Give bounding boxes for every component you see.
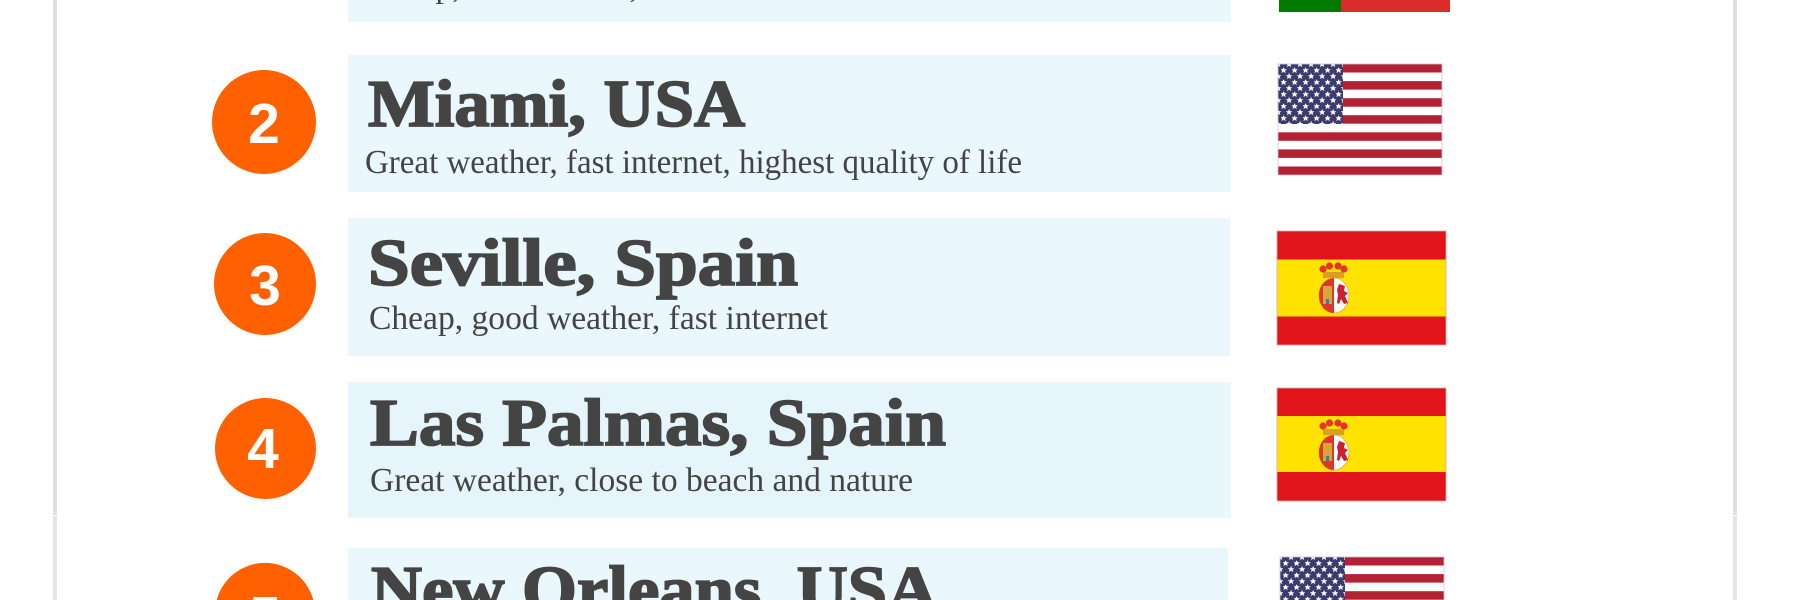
icon: Spain flag bbox=[1277, 231, 1446, 345]
crest bbox=[1319, 419, 1349, 470]
heading: Miami, USA: Miami, USA bbox=[368, 67, 745, 141]
rank badge 4 bbox=[215, 398, 316, 499]
row 1: Portugal entry, cropped by top edge bbox=[348, 0, 1450, 22]
rank badge 2 bbox=[212, 70, 316, 174]
panel: Seville bbox=[348, 218, 1230, 356]
panel: New Orleans bbox=[348, 548, 1228, 600]
heading: Seville, Spain: Seville, Spain bbox=[368, 226, 798, 300]
description: Miami: Great weather, fast internet, highest quality of life bbox=[365, 144, 1022, 181]
icon: Spain flag bbox=[1277, 388, 1446, 501]
rank badge 4: 4 bbox=[247, 417, 279, 481]
description: Seville: Cheap, good weather, fast internet bbox=[369, 300, 829, 337]
description: Las Palmas: Great weather, close to beach and nature bbox=[370, 462, 913, 499]
row 2: Miami bbox=[212, 55, 1442, 192]
heading: Las Palmas, Spain: Las Palmas, Spain bbox=[370, 386, 946, 460]
row 5: New Orleans bbox=[217, 548, 1444, 600]
icon: USA flag bbox=[1278, 64, 1442, 175]
row 4: Las Palmas bbox=[215, 382, 1446, 518]
icon: USA flag bbox=[1280, 557, 1444, 600]
rank badge 2: 2 bbox=[248, 92, 280, 156]
row 3: Seville bbox=[214, 218, 1446, 356]
rank badge 5 bbox=[217, 563, 313, 600]
rank badge 3: 3 bbox=[249, 254, 281, 318]
panel: Las Palmas bbox=[348, 382, 1231, 518]
icon: Portugal flag bbox=[1279, 0, 1450, 12]
panel: Miami bbox=[348, 55, 1231, 192]
crest bbox=[1319, 262, 1349, 313]
panel: row 1 bbox=[348, 0, 1231, 22]
rank badge 3 bbox=[214, 233, 316, 335]
